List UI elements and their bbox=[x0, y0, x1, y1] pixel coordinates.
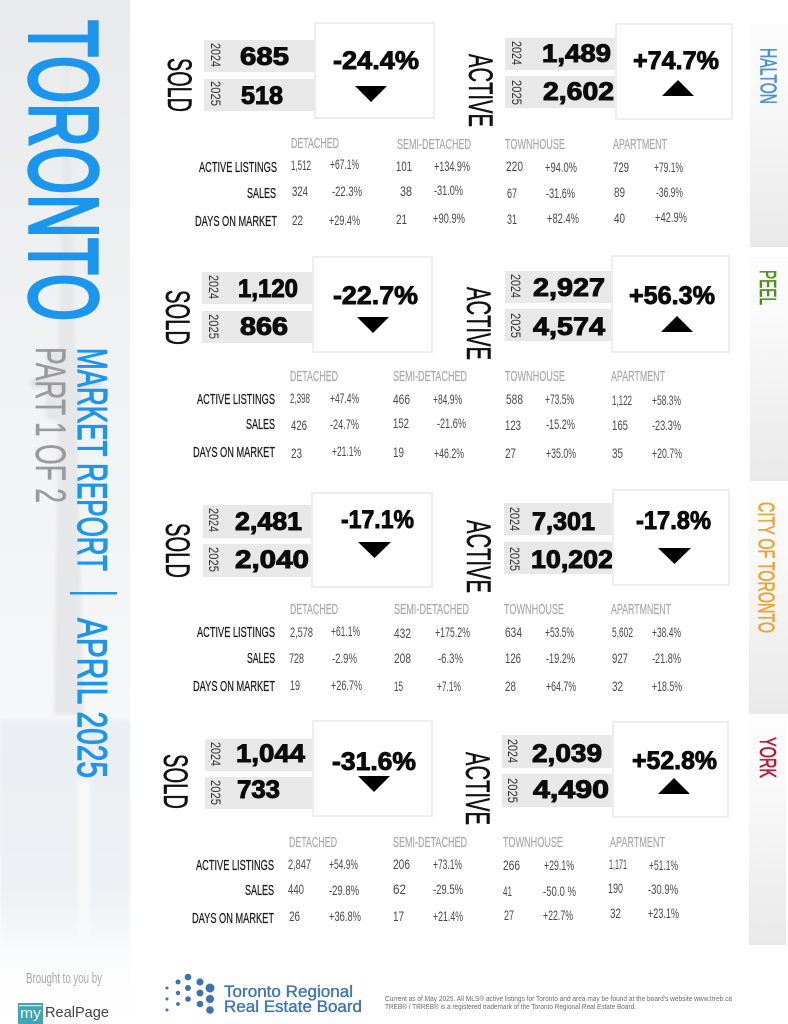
panel: City of Toronto bbox=[158, 490, 788, 714]
row: active listings: 5,602 bbox=[612, 624, 633, 640]
row: sales: -2.9% bbox=[332, 650, 357, 666]
row: days on market bbox=[193, 443, 682, 461]
row: days on market: DAYS ON MARKET bbox=[193, 444, 275, 461]
row: days on market: +21.4% bbox=[433, 908, 463, 924]
row: sales: 324 bbox=[292, 183, 308, 199]
active 2025 bar: 2025 bbox=[505, 778, 520, 803]
sold 2024 bar: 2024 bbox=[208, 43, 223, 67]
row: sales: -31.0% bbox=[434, 182, 463, 198]
region tab bbox=[749, 490, 788, 714]
table headers: DETACHED bbox=[290, 601, 338, 618]
table headers: TOWNHOUSE bbox=[504, 601, 564, 618]
active 2024 bar: 1,489 bbox=[542, 40, 611, 68]
row: active listings: +134.9% bbox=[434, 158, 470, 174]
region tab: PEEL bbox=[755, 270, 781, 305]
row: days on market: 32 bbox=[610, 905, 621, 921]
row: active listings: +84.9% bbox=[433, 391, 462, 407]
row: sales: -50.0 % bbox=[543, 883, 576, 899]
row: active listings: +53.5% bbox=[545, 624, 574, 640]
row: active listings: 1,171 bbox=[609, 856, 627, 872]
row: days on market: 35 bbox=[612, 445, 623, 461]
sold 2025 bar bbox=[204, 79, 320, 111]
sold 2025 bar: 518 bbox=[241, 82, 283, 110]
active 2024 bar: 7,301 bbox=[532, 508, 595, 536]
logo: Toronto Regional Real Estate Board bbox=[166, 974, 362, 1016]
sold 2025 bar: 2025 bbox=[208, 780, 223, 805]
row: days on market: 31 bbox=[507, 211, 517, 227]
active change box bbox=[616, 24, 732, 119]
table headers: SEMI-DETACHED bbox=[393, 834, 467, 851]
row: sales: 152 bbox=[393, 415, 409, 431]
row: days on market bbox=[192, 905, 679, 927]
logo: myRealPage: RealPage bbox=[45, 1004, 109, 1021]
row: days on market: +26.7% bbox=[331, 677, 362, 693]
sold change box bbox=[313, 721, 432, 816]
table headers: SEMI-DETACHED bbox=[394, 601, 469, 618]
row: active listings: +73.5% bbox=[545, 391, 574, 407]
row: days on market: +46.2% bbox=[434, 445, 464, 461]
active heading: ACTIVE bbox=[461, 54, 499, 127]
active 2025 bar bbox=[502, 774, 618, 807]
row: days on market: 23 bbox=[291, 445, 302, 461]
row: sales: -21.8% bbox=[652, 650, 681, 666]
sold 2025 bar: 2025 bbox=[206, 547, 221, 572]
row: active listings: 1,512 bbox=[291, 157, 311, 173]
sold 2025 bar bbox=[203, 544, 319, 577]
sold 2024 bar: 2,481 bbox=[235, 508, 302, 536]
row: sales: 126 bbox=[505, 650, 521, 666]
row: days on market: +64.7% bbox=[546, 678, 576, 694]
region tab: YORK bbox=[755, 737, 781, 778]
sold heading: SOLD bbox=[158, 290, 196, 345]
row: sales: -21.6% bbox=[437, 415, 466, 431]
sold change box: -31.6% bbox=[332, 748, 416, 776]
sold 2025 bar: 2025 bbox=[206, 314, 221, 339]
row: sales bbox=[247, 182, 683, 202]
row: sales: 165 bbox=[612, 417, 628, 433]
active heading: ACTIVE bbox=[459, 520, 497, 593]
row: days on market: +18.5% bbox=[652, 678, 682, 694]
table headers: DETACHED bbox=[290, 368, 338, 385]
active change box: -17.8% bbox=[636, 507, 711, 535]
row: active listings: +58.3% bbox=[652, 392, 681, 408]
row: days on market: 22 bbox=[292, 212, 303, 228]
row: days on market: 27 bbox=[505, 445, 516, 461]
sold 2024 bar bbox=[202, 272, 318, 304]
row: active listings bbox=[197, 390, 681, 408]
row: active listings: +47.4% bbox=[330, 390, 359, 406]
row: sales: -36.9% bbox=[656, 184, 683, 200]
row: sales: -24.7% bbox=[330, 416, 359, 432]
active 2025 bar bbox=[505, 76, 621, 108]
row: days on market: 19 bbox=[290, 677, 300, 693]
row: active listings bbox=[199, 156, 683, 176]
sponsor caption: Brought to you by bbox=[26, 970, 102, 987]
logo text line 2: Real Estate Board bbox=[224, 997, 362, 1016]
row: sales: -15.2% bbox=[546, 416, 575, 432]
row: active listings: ACTIVE LISTINGS bbox=[199, 159, 277, 176]
row: days on market: 15 bbox=[394, 678, 403, 694]
row: active listings: +61.1% bbox=[331, 623, 360, 639]
active change box bbox=[612, 256, 729, 352]
table headers: SEMI-DETACHED bbox=[393, 368, 467, 385]
row: active listings: 2,398 bbox=[290, 390, 310, 406]
row: active listings: 266 bbox=[503, 857, 520, 873]
active 2025 bar: 2,602 bbox=[543, 78, 614, 106]
row: active listings: 729 bbox=[613, 159, 629, 175]
active 2025 bar: 4,490 bbox=[533, 776, 609, 804]
row: days on market: +29.4% bbox=[329, 212, 360, 228]
row: days on market: 26 bbox=[289, 908, 300, 924]
sold change box: -22.7% bbox=[333, 282, 418, 310]
row: active listings: +54.9% bbox=[329, 856, 358, 872]
sold 2024 bar bbox=[203, 505, 319, 538]
table headers: APARTMENT bbox=[613, 136, 667, 153]
row: sales: 728 bbox=[289, 650, 304, 666]
active 2025 bar: 10,202 bbox=[531, 546, 613, 574]
footnote: TREB® / TRREB® is a registered trademark of the Toronto Regional Real Estate Board. bbox=[385, 1003, 636, 1011]
active change box: +52.8% bbox=[632, 747, 717, 775]
row: active listings: ACTIVE LISTINGS bbox=[197, 391, 275, 408]
row: sales: 440 bbox=[288, 881, 304, 897]
row: active listings: 2,847 bbox=[288, 856, 311, 872]
active 2024 bar bbox=[505, 38, 621, 70]
active change box bbox=[613, 490, 729, 585]
table headers: SEMI-DETACHED bbox=[397, 136, 471, 153]
row: active listings: 206 bbox=[393, 856, 410, 872]
sidebar background bbox=[0, 0, 130, 1024]
table headers: TOWNHOUSE bbox=[505, 136, 565, 153]
sold change box bbox=[312, 493, 432, 587]
row: sales: -19.2% bbox=[546, 650, 575, 666]
divider bar bbox=[70, 592, 117, 594]
row: sales: -31.6% bbox=[546, 185, 575, 201]
row: sales bbox=[247, 650, 681, 667]
table headers: TOWNHOUSE bbox=[505, 368, 565, 385]
sold 2024 bar: 2024 bbox=[208, 742, 223, 766]
icon: dot cluster bbox=[166, 974, 214, 1014]
row: sales: SALES bbox=[246, 416, 275, 433]
row: active listings: +79.1% bbox=[654, 159, 683, 175]
table headers: TOWNHOUSE bbox=[503, 834, 563, 851]
row: sales bbox=[245, 880, 678, 899]
logo: myRealPage bbox=[18, 1003, 109, 1024]
sold change box bbox=[315, 23, 434, 118]
sold heading: SOLD bbox=[160, 58, 198, 112]
row: days on market bbox=[195, 209, 687, 230]
row: sales: 426 bbox=[291, 417, 307, 433]
row: sales: -23.3% bbox=[652, 417, 681, 433]
row: days on market: +23.1% bbox=[648, 905, 679, 921]
sold 2024 bar: 1,120 bbox=[238, 275, 298, 303]
table headers bbox=[289, 834, 665, 851]
active 2025 bar bbox=[504, 542, 618, 574]
panel: Peel bbox=[158, 256, 788, 481]
row: sales bbox=[246, 415, 681, 433]
row: active listings: 220 bbox=[506, 158, 523, 174]
sold 2024 bar: 1,044 bbox=[236, 740, 305, 768]
sold heading: SOLD bbox=[158, 523, 196, 578]
row: sales: 38 bbox=[400, 183, 412, 199]
table headers: APARTMNENT bbox=[611, 601, 671, 618]
row: days on market: +7.1% bbox=[437, 678, 461, 694]
active 2024 bar: 2024 bbox=[505, 739, 520, 763]
row: active listings: 1,122 bbox=[612, 392, 632, 408]
row: days on market: 40 bbox=[614, 210, 625, 226]
row: active listings: 588 bbox=[506, 391, 523, 407]
subtitle: part 1 of 2: PART 1 OF 2 bbox=[26, 347, 74, 503]
active 2025 bar: 4,574 bbox=[533, 313, 605, 341]
row: active listings: +94.0% bbox=[545, 159, 577, 175]
sold change box: -24.4% bbox=[333, 47, 419, 75]
row: days on market: +42.9% bbox=[655, 209, 687, 225]
logo text line 1: Toronto Regional bbox=[224, 982, 353, 1001]
row: days on market bbox=[193, 677, 682, 695]
footnote bbox=[385, 995, 732, 1011]
title: Toronto: TORONTO bbox=[9, 20, 118, 321]
sold 2024 bar bbox=[205, 739, 318, 771]
row: active listings: ACTIVE LISTINGS bbox=[196, 857, 274, 874]
row: active listings: +67.1% bbox=[330, 156, 359, 172]
row: days on market: +20.7% bbox=[652, 445, 682, 461]
table headers: DETACHED bbox=[289, 834, 337, 851]
row: sales: 190 bbox=[608, 880, 623, 896]
image: CN Tower and skyline bbox=[0, 60, 130, 965]
active change box bbox=[613, 722, 728, 817]
row: sales: 62 bbox=[393, 881, 406, 897]
row: days on market: DAYS ON MARKET bbox=[195, 213, 277, 230]
sold 2024 bar bbox=[204, 40, 320, 72]
active change box: +74.7% bbox=[633, 47, 719, 75]
row: active listings: ACTIVE LISTINGS bbox=[197, 624, 275, 641]
row: days on market: DAYS ON MARKET bbox=[193, 678, 275, 695]
active 2025 bar bbox=[505, 309, 617, 341]
row: sales: SALES bbox=[245, 882, 274, 899]
panel: sidebar bbox=[0, 0, 130, 1024]
sold 2025 bar bbox=[202, 311, 318, 343]
active 2025 bar: 2025 bbox=[507, 547, 522, 571]
panel: York bbox=[156, 721, 786, 945]
row: sales: -30.9% bbox=[648, 881, 678, 897]
table headers bbox=[290, 601, 671, 618]
subtitle: date: APRIL 2025 bbox=[69, 618, 116, 778]
row: sales: -29.5% bbox=[433, 881, 463, 897]
active 2024 bar: 2,039 bbox=[532, 740, 602, 768]
row: days on market: 27 bbox=[504, 907, 514, 923]
row: sales: 208 bbox=[394, 650, 411, 666]
row: active listings: 466 bbox=[393, 391, 410, 407]
active change box: +56.3% bbox=[629, 282, 715, 310]
row: active listings bbox=[197, 623, 681, 641]
row: days on market: 19 bbox=[393, 444, 404, 460]
active 2024 bar: 2,927 bbox=[533, 274, 605, 302]
row: days on market: DAYS ON MARKET bbox=[192, 910, 274, 927]
row: active listings: +51.1% bbox=[649, 857, 678, 873]
row: active listings bbox=[196, 856, 678, 874]
table headers bbox=[290, 368, 665, 385]
row: active listings: +73.1% bbox=[433, 856, 462, 872]
sold 2025 bar: 2025 bbox=[208, 81, 223, 106]
row: sales: SALES bbox=[247, 650, 275, 667]
row: days on market: +82.4% bbox=[547, 210, 579, 226]
sold 2025 bar: 866 bbox=[240, 313, 288, 341]
table headers: APARTMENT bbox=[610, 834, 665, 851]
active 2024 bar bbox=[504, 503, 618, 536]
row: sales: 41 bbox=[503, 883, 512, 899]
active 2024 bar bbox=[502, 735, 618, 768]
row: days on market: 21 bbox=[396, 211, 407, 227]
row: active listings: 101 bbox=[396, 158, 412, 174]
row: days on market: 28 bbox=[505, 678, 516, 694]
row: days on market: +21.1% bbox=[332, 443, 361, 459]
panel: Halton bbox=[160, 23, 788, 247]
row: active listings: 2,578 bbox=[290, 624, 313, 640]
region tab: CITY OF TORONTO bbox=[754, 502, 780, 633]
region tab bbox=[750, 24, 788, 247]
sold change box bbox=[313, 257, 432, 352]
region tab bbox=[750, 257, 788, 481]
row: active listings: +38.4% bbox=[652, 624, 681, 640]
table headers: APARTMENT bbox=[611, 368, 665, 385]
logo: myRealPage: my bbox=[20, 1005, 42, 1022]
row: sales: 67 bbox=[507, 185, 517, 201]
active 2024 bar bbox=[505, 271, 617, 303]
sold 2024 bar: 2024 bbox=[206, 275, 221, 299]
active 2025 bar: 2025 bbox=[509, 80, 524, 105]
active 2024 bar: 2024 bbox=[509, 41, 524, 65]
row: days on market: 32 bbox=[612, 678, 623, 694]
sold 2024 bar: 2024 bbox=[206, 508, 221, 532]
sold change box: -17.1% bbox=[341, 506, 414, 534]
footnote: Current as of May 2025. All MLS® active listings for Toronto and area may be found at the board's website www.trreb.ca bbox=[385, 995, 732, 1003]
active 2024 bar: 2024 bbox=[508, 274, 523, 298]
table headers bbox=[291, 135, 667, 153]
row: active listings: +175.2% bbox=[435, 624, 470, 640]
table headers: DETACHED bbox=[291, 135, 339, 152]
row: active listings: 432 bbox=[394, 625, 411, 641]
row: sales: 89 bbox=[614, 184, 625, 200]
region tab bbox=[749, 722, 786, 945]
active heading: ACTIVE bbox=[459, 287, 497, 360]
row: sales: -29.8% bbox=[329, 882, 359, 898]
row: days on market: +36.8% bbox=[329, 908, 361, 924]
active 2024 bar: 2024 bbox=[507, 507, 522, 531]
row: sales: 123 bbox=[505, 417, 521, 433]
row: days on market: +35.0% bbox=[546, 445, 576, 461]
row: active listings: 634 bbox=[505, 624, 522, 640]
sold 2025 bar: 2,040 bbox=[235, 546, 309, 574]
row: days on market: +90.9% bbox=[433, 210, 465, 226]
subtitle: market report: MARKET REPORT bbox=[69, 348, 116, 571]
row: sales: -22.3% bbox=[332, 183, 362, 199]
region tab: HALTON bbox=[756, 48, 782, 104]
row: sales: SALES bbox=[247, 185, 276, 202]
active heading: ACTIVE bbox=[458, 752, 496, 825]
row: active listings: +29.1% bbox=[544, 857, 574, 873]
sold 2024 bar: 685 bbox=[240, 43, 289, 71]
sold heading: SOLD bbox=[156, 754, 194, 809]
row: sales: -6.3% bbox=[438, 650, 463, 666]
sold 2025 bar: 733 bbox=[237, 776, 280, 804]
active 2025 bar: 2025 bbox=[508, 313, 523, 338]
row: sales: 927 bbox=[612, 650, 628, 666]
sold 2025 bar bbox=[205, 776, 318, 809]
row: days on market: 17 bbox=[393, 908, 404, 924]
row: days on market: +22.7% bbox=[543, 907, 573, 923]
